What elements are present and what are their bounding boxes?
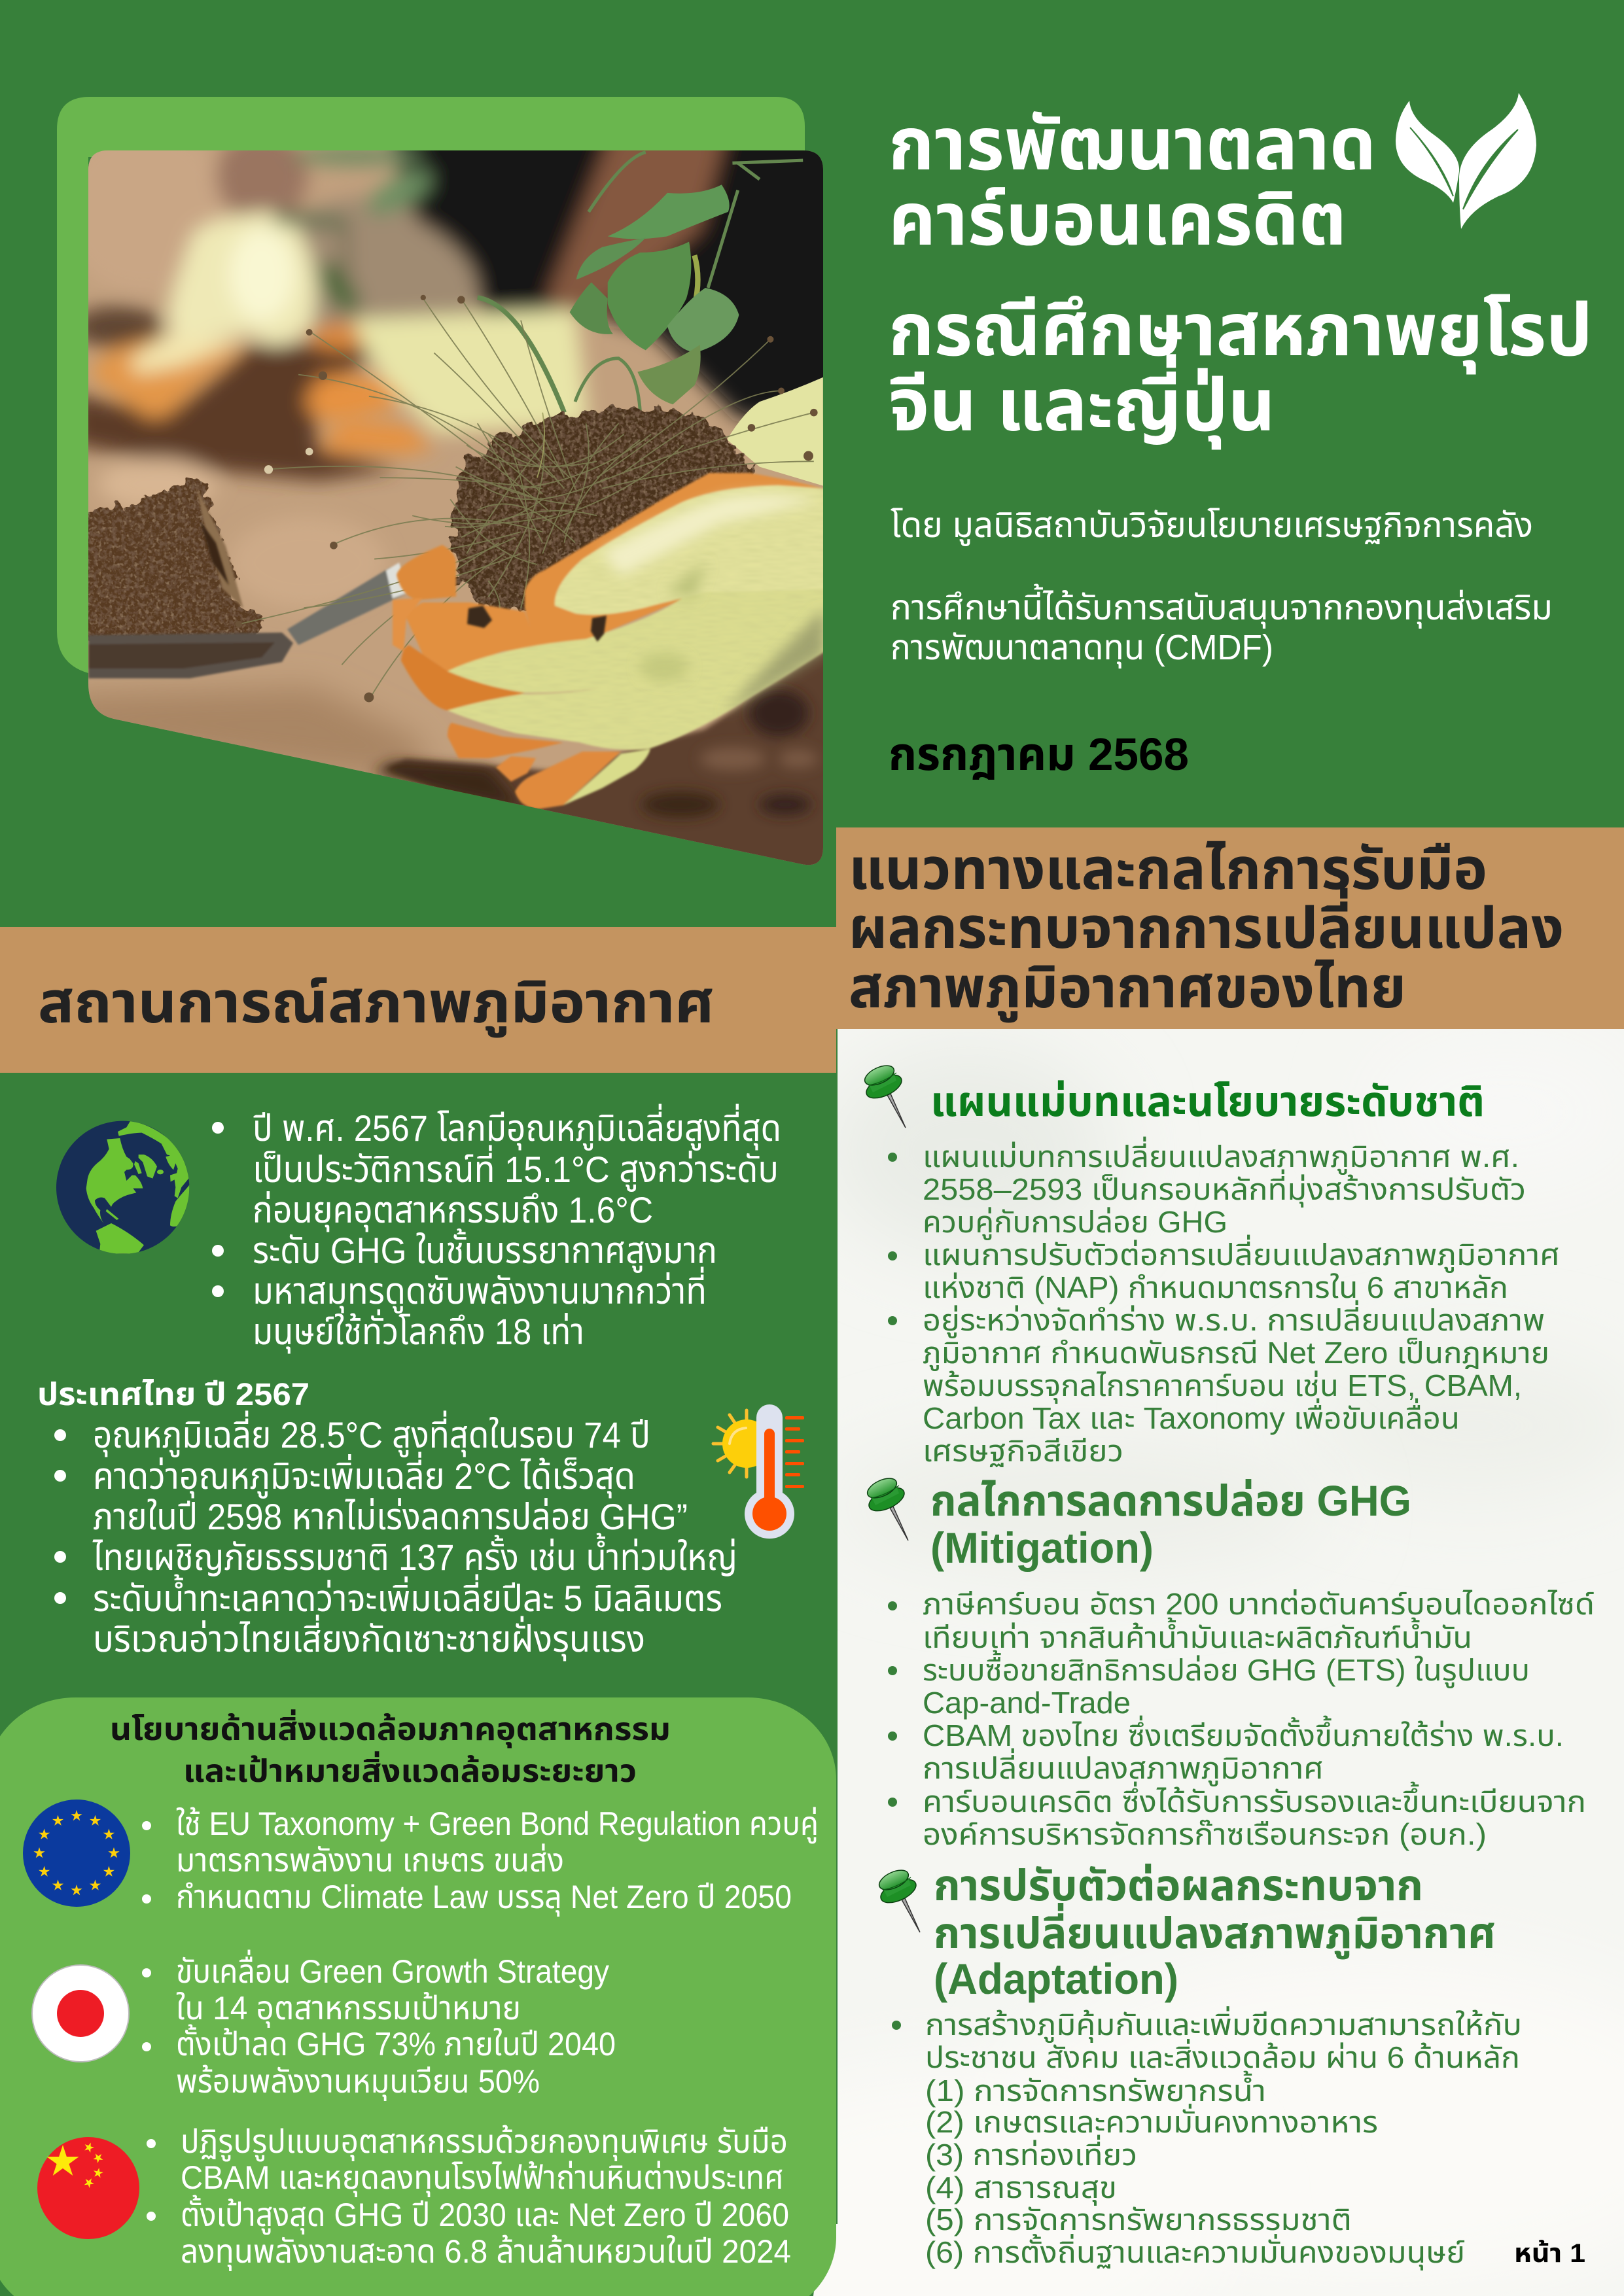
text block: China policy: ตั้งเป้าสูงสุด GHG ปี 2030 และ Net Zero ปี 2060 [181, 2195, 789, 2235]
text block: adaptation bullets: (2) เกษตรและความมั่นคงทางอาหาร [925, 2104, 1378, 2139]
text block: adaptation bullets: (6) การตั้งถิ่นฐานและความมั่นคงของมนุษย์ [925, 2234, 1465, 2270]
date: กรกฎาคม 2568 [889, 729, 1189, 780]
icon: globe [56, 1121, 192, 1254]
page number: หน้า 1 [1514, 2238, 1585, 2268]
text block: Japan policy: ใน 14 อุตสาหกรรมเป้าหมาย [176, 1990, 521, 2028]
text block: authors and funding: โดย มูลนิธิสถาบันวิจัยนโยบายเศรษฐกิจการคลัง [891, 506, 1533, 546]
text block: EU policy: มาตรการพลังงาน เกษตร ขนส่ง [176, 1842, 564, 1879]
icon: EU flag [23, 1800, 130, 1907]
text block: global climate facts [212, 1104, 781, 1353]
text block: adaptation bullets: ประชาชน สังคม และสิ่งแวดล้อม ผ่าน 6 ด้านหลัก [925, 2039, 1520, 2074]
title: กรณีศึกษาสหภาพยุโรป [889, 289, 1593, 374]
heading: adaptation: การปรับตัวต่อผลกระทบจาก [934, 1861, 1423, 1909]
text block: national plan bullets: Carbon Tax และ Taxonomy เพื่อขับเคลื่อน [923, 1398, 1460, 1435]
icon: white leaves logo [1396, 93, 1536, 229]
text block: global climate facts: เป็นประวัติการณ์ที่ 15.1°C สูงกว่าระดับ [253, 1145, 779, 1192]
text block: authors and funding: การศึกษานี้ได้รับการสนับสนุนจากกองทุนส่งเสริม [891, 583, 1553, 629]
text block: China policy [147, 2123, 791, 2271]
text block: adaptation bullets: การสร้างภูมิคุ้มกันและเพิ่มขีดความสามารถให้กับ [925, 2006, 1522, 2043]
heading: mitigation: กลไกการลดการปล่อย GHG [930, 1476, 1411, 1525]
text block: Japan policy: ตั้งเป้าลด GHG 73% ภายในปี 2040 [176, 2024, 616, 2062]
heading: Thai response guidelines band: ผลกระทบจากการเปลี่ยนแปลง [849, 888, 1564, 960]
text block: Thailand climate facts: อุณหภูมิเฉลี่ย 28.5°C สูงที่สุดในรอบ 74 ปี [93, 1410, 650, 1457]
text block: national plan bullets: แผนแม่บทการเปลี่ยนแปลงสภาพภูมิอากาศ พ.ศ. [923, 1136, 1519, 1175]
text block: adaptation bullets: (3) การท่องเที่ยว [925, 2134, 1137, 2172]
text block: mitigation bullets: การเปลี่ยนแปลงสภาพภูมิอากาศ [923, 1748, 1324, 1786]
text block: national plan bullets: ควบคู่กับการปล่อย GHG [923, 1205, 1227, 1240]
heading: policy panel [110, 1709, 671, 1789]
heading: adaptation [934, 1861, 1496, 2003]
heading: adaptation: การเปลี่ยนแปลงสภาพภูมิอากาศ [934, 1903, 1496, 1959]
text block: mitigation bullets [888, 1587, 1595, 1851]
text block: adaptation bullets [892, 2006, 1522, 2270]
icon: pin mitigation [864, 1474, 908, 1540]
text block: mitigation bullets: คาร์บอนเครดิต ซึ่งได้รับการรับรองและขึ้นทะเบียนจาก [923, 1781, 1586, 1818]
heading: Thai response guidelines band [836, 827, 1624, 1029]
mound [79, 480, 266, 641]
title: จีน และญี่ปุ่น [889, 354, 1275, 449]
heading: mitigation [930, 1476, 1411, 1572]
text block: Thailand climate facts: ไทยเผชิญภัยธรรมชาติ 137 ครั้ง เช่น น้ำท่วมใหญ่ [92, 1533, 737, 1578]
text block: global climate facts: มหาสมุทรดูดซับพลังงานมากกว่าที่ [253, 1266, 707, 1313]
text block: national plan bullets: ภูมิอากาศ กำหนดพันธกรณี Net Zero เป็นกฎหมาย [923, 1336, 1549, 1371]
title [889, 103, 1593, 449]
heading: climate situation band [0, 927, 836, 1073]
heading: Thai response guidelines band: สภาพภูมิอากาศของไทย [849, 955, 1406, 1023]
icon: pin national plan [862, 1062, 906, 1128]
panel: industrial policy and long-term targets [0, 1697, 836, 2296]
text block: mitigation bullets: CBAM ของไทย ซึ่งเตรียมจัดตั้งขึ้นภายใต้ร่าง พ.ร.บ. [923, 1715, 1564, 1752]
heading: Thai response guidelines band: แนวทางและกลไกการรับมือ [849, 837, 1487, 901]
icon: thermometer and sun [713, 1404, 804, 1539]
heading: mitigation: (Mitigation) [930, 1523, 1154, 1572]
heading: policy panel: และเป้าหมายสิ่งแวดล้อมระยะยาว [183, 1751, 637, 1789]
icon: pin adaptation [876, 1866, 920, 1932]
hand crevices [467, 606, 607, 642]
text block: national plan bullets: เศรษฐกิจสีเขียว [923, 1434, 1123, 1468]
lower ground [65, 687, 432, 785]
text block: China policy: ลงทุนพลังงานสะอาด 6.8 ล้านล้านหยวนในปี 2024 [181, 2233, 791, 2271]
text block: China policy: ปฏิรูปรูปแบบอุตสาหกรรมด้วยกองทุนพิเศษ รับมือ [181, 2123, 788, 2161]
panel: light green photo backing [57, 97, 805, 673]
text block: authors and funding [891, 506, 1553, 669]
text block: EU policy [142, 1805, 819, 1917]
soil clump [453, 408, 759, 612]
text block: Thailand climate facts [54, 1410, 737, 1661]
text block: Japan policy: ขับเคลื่อน Green Growth Strategy [176, 1949, 609, 1990]
text block: EU policy: กำหนดตาม Climate Law บรรลุ Net Zero ปี 2050 [176, 1879, 792, 1917]
text block: national plan bullets: อยู่ระหว่างจัดทำร่าง พ.ร.บ. การเปลี่ยนแปลงสภาพ [923, 1300, 1545, 1338]
text block: national plan bullets: แผนการปรับตัวต่อการเปลี่ยนแปลงสภาพภูมิอากาศ [923, 1234, 1560, 1273]
text block: mitigation bullets: ภาษีคาร์บอน อัตรา 200 บาทต่อตันคาร์บอนไดออกไซด์ [923, 1587, 1595, 1621]
hand shading [602, 495, 824, 715]
text block: global climate facts: ก่อนยุคอุตสาหกรรมถึง 1.6°C [253, 1189, 653, 1232]
panel: right body background [674, 1029, 1624, 2296]
text block: Japan policy [142, 1949, 616, 2101]
text block: Thailand climate facts: คาดว่าอุณหภูมิจะเพิ่มเฉลี่ย 2°C ได้เร็วสุด [93, 1452, 635, 1499]
text block: Thailand climate facts: ภายในปี 2598 หากไม่เร่งลดการปล่อย GHG” [93, 1496, 688, 1537]
text block: China policy: CBAM และหยุดลงทุนโรงไฟฟ้าถ่านหินต่างประเทศ [181, 2159, 784, 2197]
grass [236, 295, 818, 702]
text block: national plan bullets: 2558–2593 เป็นกรอบหลักที่มุ่งสร้างการปรับตัว [923, 1169, 1526, 1208]
dark sliver behind policy panel corner [785, 2269, 817, 2296]
text block: national plan bullets: พร้อมบรรจุกลไกราคาคาร์บอน เช่น ETS, CBAM, [923, 1368, 1522, 1404]
text block: Japan policy: พร้อมพลังงานหมุนเวียน 50% [176, 2063, 540, 2101]
trowel [88, 563, 409, 678]
heading: Thailand 2567: ประเทศไทย ปี 2567 [37, 1378, 309, 1412]
icon: China flag [37, 2137, 139, 2239]
title: การพัฒนาตลาด [889, 103, 1376, 185]
text block: EU policy: ใช้ EU Taxonomy + Green Bond Regulation ควบคู่ [176, 1805, 819, 1843]
title: คาร์บอนเครดิต [889, 179, 1347, 260]
text block: global climate facts: ระดับ GHG ในชั้นบรรยากาศสูงมาก [253, 1228, 717, 1273]
text block: mitigation bullets: ระบบซื้อขายสิทธิการปล่อย GHG (ETS) ในรูปแบบ [923, 1650, 1530, 1688]
plant [478, 152, 823, 486]
text block: mitigation bullets: เทียบเท่า จากสินค้าน้ำมันและผลิตภัณฑ์น้ำมัน [923, 1617, 1472, 1654]
text block: adaptation bullets: (5) การจัดการทรัพยากรธรรมชาติ [925, 2202, 1352, 2236]
text block: authors and funding: การพัฒนาตลาดทุน (CMDF) [891, 628, 1273, 669]
heading: national master plan and policy: แผนแม่บทและนโยบายระดับชาติ [930, 1078, 1485, 1125]
text block: national plan bullets: แห่งชาติ (NAP) กำหนดมาตรการใน 6 สาขาหลัก [923, 1270, 1508, 1304]
icon: Japan flag [32, 1965, 129, 2062]
text block: adaptation bullets: (4) สาธารณสุข [925, 2170, 1117, 2206]
heading: adaptation: (Adaptation) [934, 1955, 1178, 2003]
text block: mitigation bullets: องค์การบริหารจัดการก๊าซเรือนกระจก (อบก.) [923, 1817, 1487, 1851]
text block: global climate facts: มนุษย์ใช้ทั่วโลกถึง 18 เท่า [253, 1309, 584, 1353]
hand and fingers [393, 473, 824, 809]
text block: global climate facts: ปี พ.ศ. 2567 โลกมีอุณหภูมิเฉลี่ยสูงที่สุด [253, 1104, 781, 1151]
text block: Thailand climate facts: บริเวณอ่าวไทยเสี่ยงกัดเซาะชายฝั่งรุนแรง [93, 1614, 645, 1661]
text block: national plan bullets [888, 1136, 1560, 1468]
text block: mitigation bullets: Cap-and-Trade [923, 1686, 1131, 1720]
heading: climate situation band: สถานการณ์สภาพภูมิอากาศ [38, 970, 715, 1038]
heading: policy panel: นโยบายด้านสิ่งแวดล้อมภาคอุตสาหกรรม [110, 1709, 671, 1748]
text block: Thailand climate facts: ระดับน้ำทะเลคาดว่าจะเพิ่มเฉลี่ยปีละ 5 มิลลิเมตร [93, 1574, 722, 1619]
photo: gloved hands holding soil and plant [88, 150, 823, 865]
text block: adaptation bullets: (1) การจัดการทรัพยากรน้ำ [925, 2070, 1266, 2108]
